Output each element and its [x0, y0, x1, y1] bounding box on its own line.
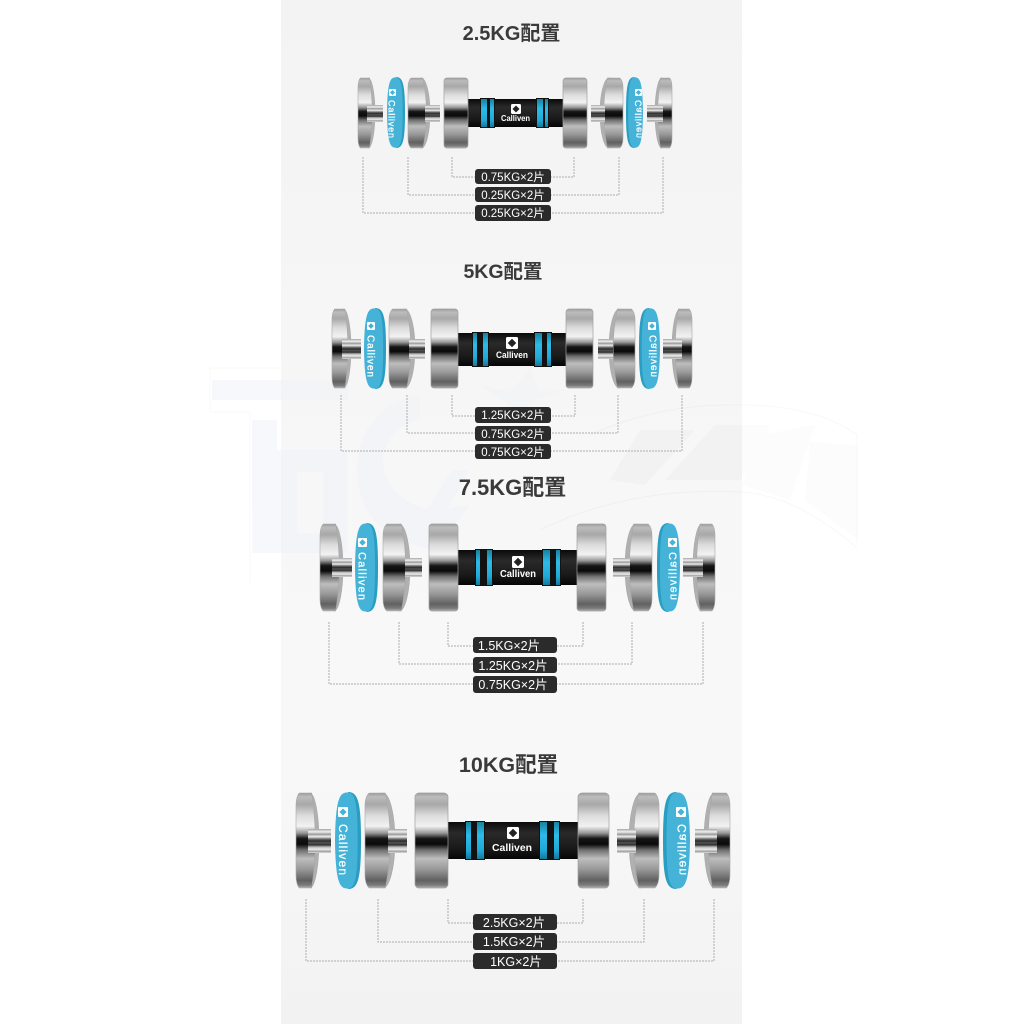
blue rings: Calliven: [336, 824, 350, 875]
bar: [466, 98, 564, 128]
title: 5KG: 5KG配置: [463, 261, 543, 283]
blue rings: Calliven: [648, 335, 660, 377]
bar: [456, 549, 581, 586]
weight labels: 1.25KG×2片: [478, 659, 548, 673]
title: 10KG: 10KG配置: [459, 753, 558, 777]
bar: Calliven: [496, 350, 528, 360]
dumbbell: 2.5KG: [358, 77, 672, 221]
blue rings: Calliven: [634, 100, 644, 138]
plates: [358, 78, 672, 148]
weight labels: 0.75KG×2片: [481, 171, 545, 184]
blue rings: Calliven: [356, 552, 368, 600]
weight labels: [475, 169, 551, 221]
weight labels: 1.5KG×2片: [483, 935, 545, 949]
leader lines: [329, 622, 703, 684]
bar: Calliven: [501, 114, 530, 123]
plates: [296, 793, 730, 888]
dumbbell: 5KG: [332, 308, 692, 459]
threaded studs: [342, 339, 682, 359]
plates: [332, 309, 692, 388]
weight labels: 0.25KG×2片: [481, 189, 545, 202]
bar: [445, 821, 580, 860]
dumbbell: 7.5KG: [320, 523, 715, 693]
blue rings: [386, 77, 644, 148]
leader lines: [341, 395, 682, 451]
blue rings: Calliven: [668, 552, 680, 600]
blue rings: Calliven: [364, 335, 376, 377]
weight labels: 1KG×2片: [490, 955, 542, 969]
bar: Calliven: [492, 842, 532, 854]
blue rings: [335, 792, 690, 889]
threaded studs: [332, 558, 703, 577]
title: 2.5KG: 2.5KG配置: [463, 23, 560, 45]
blue rings: Calliven: [675, 824, 689, 875]
leader lines: [306, 899, 714, 961]
threaded studs: [308, 829, 717, 853]
dumbbell: 10KG: [296, 792, 730, 969]
blue rings: Calliven: [386, 100, 396, 138]
blue rings: [364, 308, 660, 389]
watermark: [210, 368, 858, 582]
weight labels: 1.25KG×2片: [481, 409, 545, 422]
bar: Calliven: [500, 569, 536, 580]
bar: [455, 332, 568, 367]
blue rings: [355, 523, 680, 612]
weight labels: [475, 407, 551, 459]
weight labels: 0.25KG×2片: [481, 207, 545, 220]
plates: [320, 524, 715, 611]
weight labels: 1.5KG×2片: [478, 639, 540, 653]
weight labels: 0.75KG×2片: [481, 446, 545, 459]
threaded studs: [367, 105, 663, 122]
weight labels: 2.5KG×2片: [483, 916, 545, 930]
weight labels: 0.75KG×2片: [478, 678, 548, 692]
weight labels: [473, 914, 557, 969]
weight labels: [473, 637, 557, 693]
weight labels: 0.75KG×2片: [481, 428, 545, 441]
title: 7.5KG: 7.5KG配置: [459, 475, 566, 500]
leader lines: [363, 157, 663, 213]
background panel: [281, 0, 742, 1024]
